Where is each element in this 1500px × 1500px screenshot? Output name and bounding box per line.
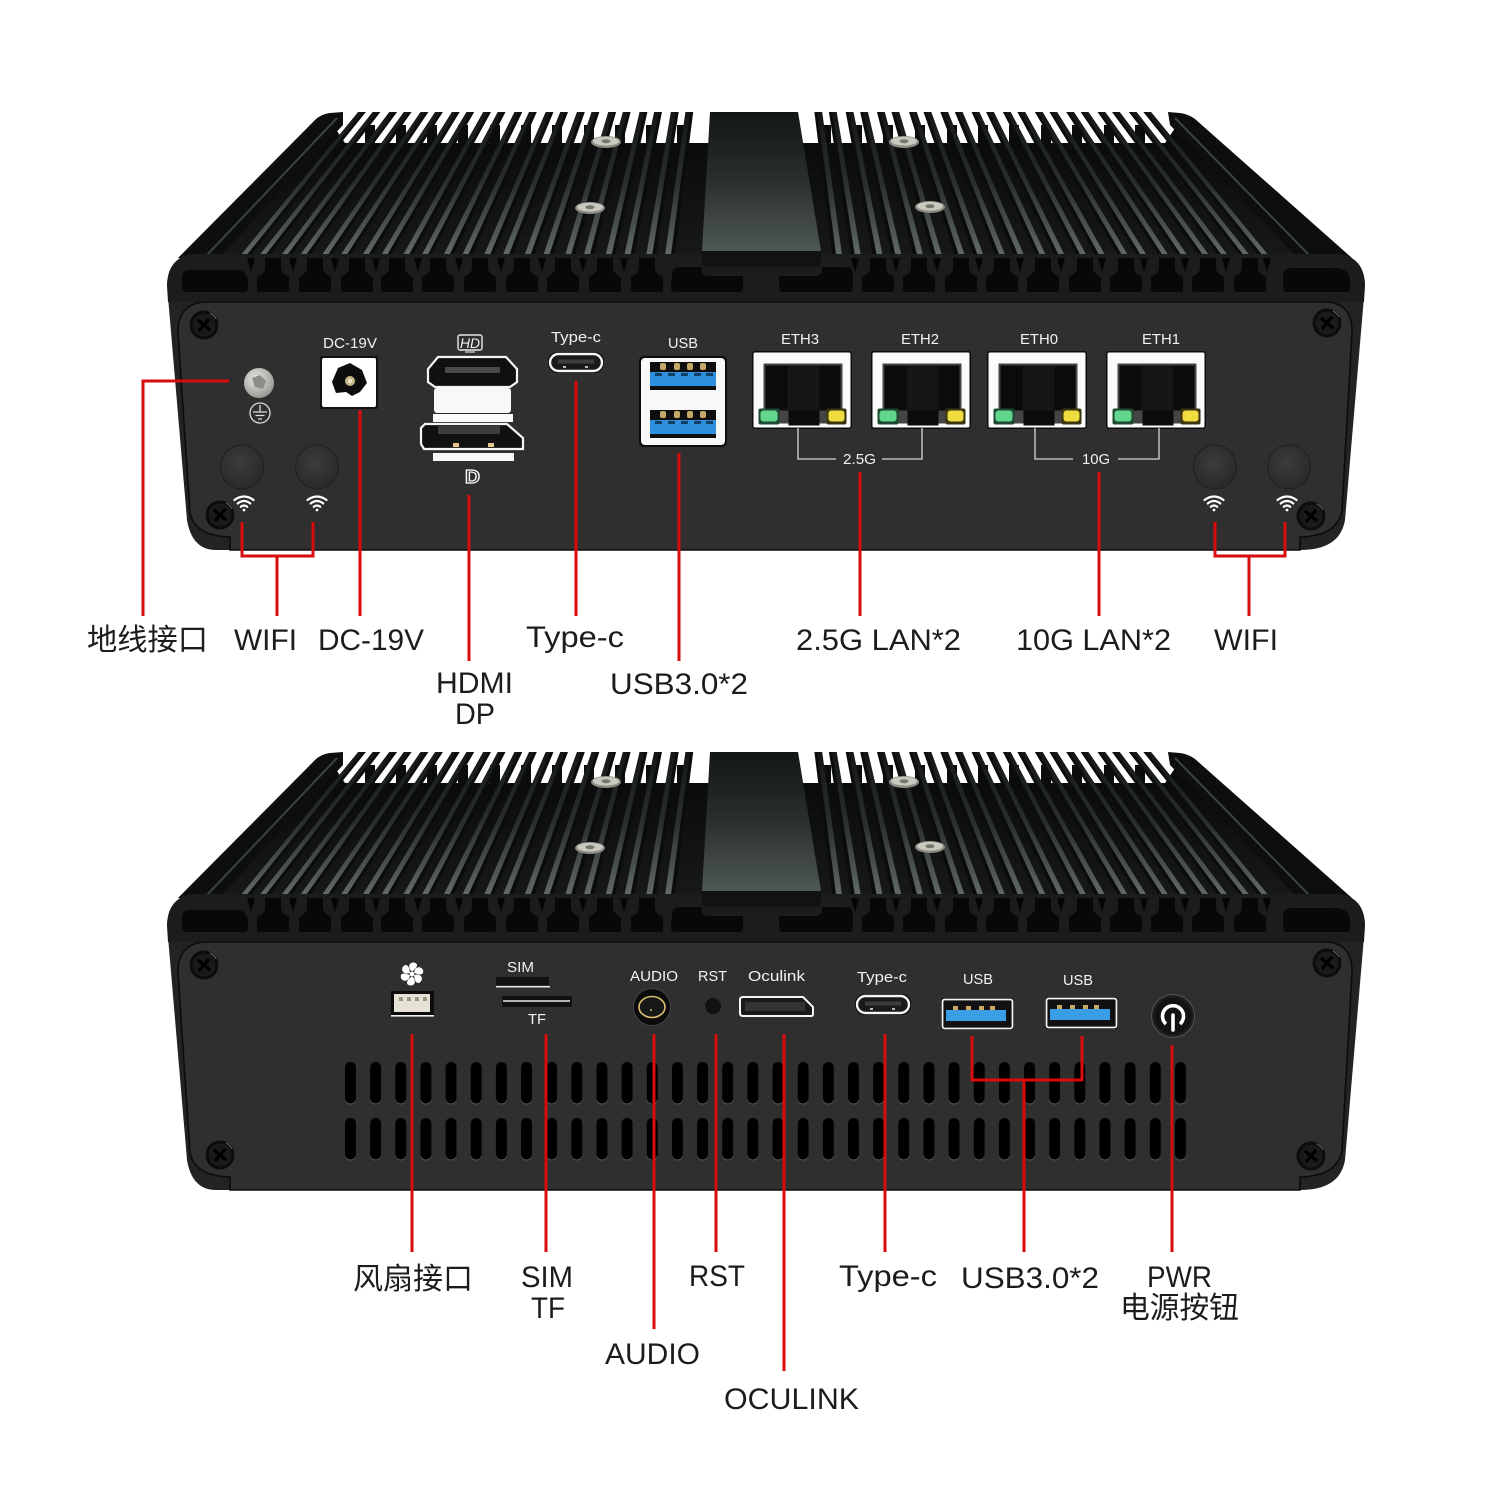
bracket: 10G: 10G	[1082, 451, 1110, 468]
icon: HD logo: HD	[460, 335, 480, 351]
port: fan header	[391, 991, 434, 1017]
panel: front ports	[345, 959, 1194, 1161]
icon: ground screw	[244, 368, 274, 398]
label: SIM: SIM	[507, 959, 534, 976]
labels: front callouts: RST	[689, 1260, 745, 1293]
labels: rear callouts: 10G LAN*2	[1016, 624, 1171, 657]
labels: front callouts: 电源按钮	[1120, 1292, 1239, 1325]
ports: RJ45	[752, 351, 1206, 429]
icon: fan	[400, 962, 424, 986]
port: HDMI	[428, 357, 517, 387]
icon: DP logo: D	[465, 467, 480, 487]
labels: rear callouts: 地线接口	[87, 624, 208, 657]
button: reset	[705, 998, 721, 1014]
labels: rear callouts: WIFI	[1214, 624, 1278, 657]
port: USB3.0	[941, 998, 1014, 1030]
port: Oculink	[740, 997, 813, 1016]
WiFi icons	[234, 496, 1296, 511]
labels: rear callouts: HDMI	[436, 667, 513, 700]
vent slots	[345, 1062, 1188, 1161]
port: TF slot	[502, 996, 572, 1007]
labels: ETH ports: ETH1	[1142, 331, 1180, 348]
bracket: 2.5G: 2.5G	[843, 451, 876, 468]
panel: rear ports	[220, 329, 1311, 511]
port: DisplayPort	[421, 424, 523, 461]
labels: front callouts: 风扇接口	[353, 1263, 473, 1296]
labels: ETH ports	[781, 331, 1180, 348]
labels: rear callouts: DP	[455, 698, 495, 731]
labels: front callouts: AUDIO	[605, 1338, 700, 1371]
labels: rear callouts	[87, 621, 1278, 731]
labels: front callouts: Type-c	[839, 1260, 937, 1293]
port: white bracket between HDMI and DP	[433, 388, 513, 422]
icon: ground symbol	[250, 403, 270, 423]
label: DC-19V: DC-19V	[323, 335, 377, 352]
label: USB: USB	[668, 335, 698, 352]
label: AUDIO: AUDIO	[630, 968, 678, 985]
labels: rear callouts: DC-19V	[318, 624, 424, 657]
label: USB: USB	[963, 971, 993, 988]
label: Type-c: Type-c	[551, 329, 602, 346]
port: SIM slot	[496, 977, 550, 988]
label: Oculink: Oculink	[748, 968, 806, 985]
port: dual USB3.0	[639, 356, 727, 447]
WiFi antenna caps	[220, 444, 1311, 490]
labels: front callouts: TF	[531, 1292, 565, 1325]
labels: front callouts: PWR	[1147, 1261, 1212, 1294]
button: power	[1152, 994, 1194, 1038]
labels: front callouts: USB3.0*2	[961, 1262, 1099, 1295]
port: Type-c	[548, 352, 604, 373]
red leader lines: front	[412, 1034, 1172, 1371]
labels: rear callouts: 2.5G LAN*2	[796, 624, 961, 657]
port: USB3.0	[1045, 997, 1118, 1029]
labels: ETH ports: ETH0	[1020, 331, 1058, 348]
device: rear view body with heatsink	[167, 112, 1365, 550]
port: Type-c	[855, 994, 911, 1015]
labels: front callouts: SIM	[521, 1261, 573, 1294]
labels: rear callouts: WIFI	[234, 624, 297, 657]
label: TF: TF	[528, 1011, 546, 1028]
labels: ETH ports: ETH3	[781, 331, 819, 348]
port: audio jack	[634, 988, 670, 1026]
bracket: 10G	[1035, 428, 1159, 468]
port: DC jack	[320, 356, 378, 409]
bracket: 2.5G	[798, 428, 922, 468]
labels: front callouts	[353, 1260, 1239, 1416]
labels: rear callouts: Type-c	[526, 621, 624, 654]
labels: front callouts: OCULINK	[724, 1383, 859, 1416]
label: Type-c: Type-c	[857, 969, 908, 986]
red leader lines: rear	[143, 381, 1285, 661]
label: USB: USB	[1063, 972, 1093, 989]
label: RST: RST	[698, 968, 727, 985]
labels: rear callouts: USB3.0*2	[610, 668, 748, 701]
device: front view body with heatsink	[167, 752, 1365, 1190]
labels: ETH ports: ETH2	[901, 331, 939, 348]
